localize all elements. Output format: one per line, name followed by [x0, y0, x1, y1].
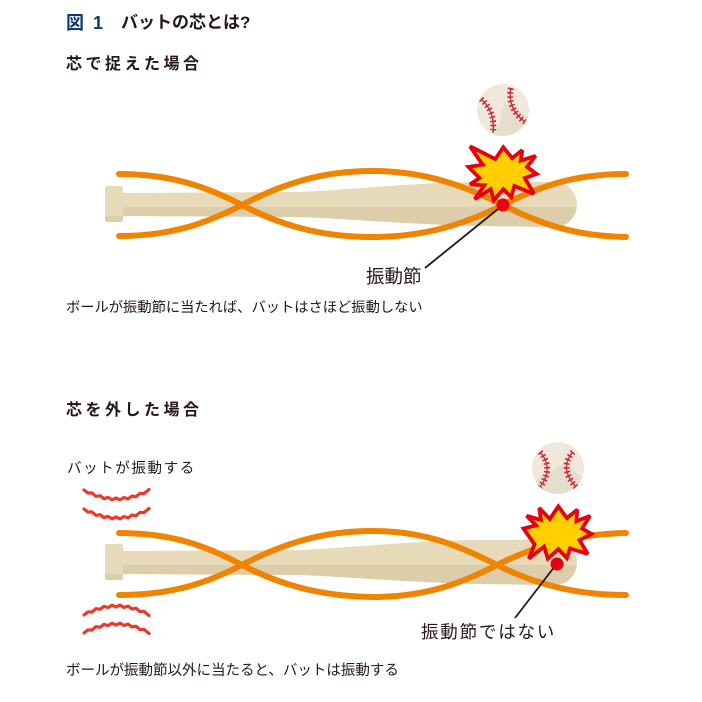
heading: sweet spot: 芯で捉えた場合	[66, 56, 203, 73]
icon: bat	[105, 540, 577, 585]
figure number: 図 1	[66, 13, 105, 33]
icon: baseball	[477, 84, 529, 136]
caption: off the sweet spot: ボールが振動節以外に当たると、バットは振動する	[66, 663, 399, 679]
vibration node dot	[496, 198, 510, 212]
title: バットの芯とは?	[121, 13, 250, 32]
heading: off the sweet spot: 芯を外した場合	[66, 402, 203, 419]
vibration waves: top	[84, 490, 149, 519]
figure graphics	[82, 84, 629, 636]
icon: bat	[105, 182, 577, 227]
label: vibration node: 振動節	[366, 266, 422, 287]
icon: impact burst	[523, 506, 592, 559]
vibration curves	[119, 171, 626, 237]
icon: baseball	[532, 442, 584, 494]
vibration node dot	[550, 558, 564, 570]
panel: hit on the sweet spot	[100, 84, 626, 268]
panel: hit off the sweet spot	[84, 442, 626, 634]
leader line	[515, 566, 555, 618]
caption: sweet spot: ボールが振動節に当たれば、バットはさほど振動しない	[66, 300, 423, 316]
vibration waves: bottom	[84, 605, 149, 634]
icon: impact burst	[468, 146, 537, 200]
label: not a vibration node: 振動節ではない	[421, 622, 556, 642]
label: bat vibrates: バットが振動する	[67, 461, 196, 477]
leader line	[425, 205, 503, 268]
vibration curves	[119, 531, 626, 597]
